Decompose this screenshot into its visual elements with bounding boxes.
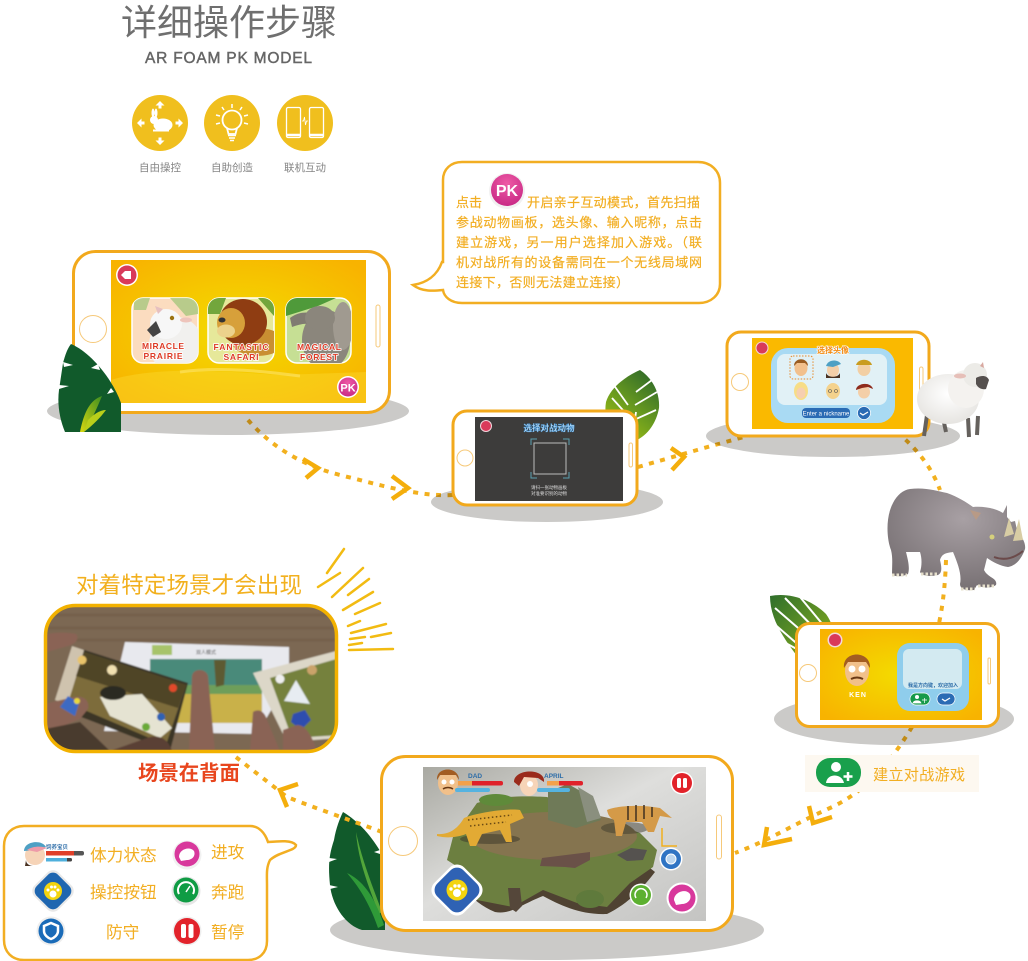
button: run <box>630 884 652 906</box>
avatar panel: 选择头像 <box>817 345 849 355</box>
phone 3: choose avatar <box>727 332 929 436</box>
arrow: chevron 1 <box>303 459 318 478</box>
shadow: phone 2 <box>431 482 663 522</box>
player status DAD: DAD <box>468 773 482 780</box>
caption: scene on the back: 场景在背面 <box>138 762 240 785</box>
leaf: dark green front of phone 1 <box>58 344 121 432</box>
nickname button: Enter a nickname <box>803 412 850 418</box>
phone 2: scan animal card <box>453 411 637 505</box>
shadow: phone 3 <box>706 415 960 457</box>
home button <box>80 316 106 342</box>
tile: Magical Forest <box>286 298 353 370</box>
legend label: run: 奔跑 <box>211 883 245 902</box>
legend icon: status bar <box>24 842 84 866</box>
tile: Fantastic Safari: FANTASTIC <box>214 342 268 352</box>
icon caption: free control: 自由操控 <box>139 161 181 174</box>
legend icon: defend <box>36 916 66 946</box>
speaker slot <box>716 815 722 859</box>
home button <box>457 450 473 466</box>
button: attack <box>666 882 698 914</box>
callout text: 参战动物画板，选头像、输入昵称，点击 <box>456 215 702 230</box>
phone 4 screen <box>820 629 982 720</box>
legend label: defend: 防守 <box>106 923 139 942</box>
legend icon: run <box>172 876 200 906</box>
speaker slot <box>920 367 923 392</box>
leaf: dark green behind phone 5 <box>329 812 385 930</box>
player status APRIL <box>514 772 583 796</box>
burst rays decoration <box>318 549 393 650</box>
PK button in callout: PK <box>496 183 519 200</box>
shadow: phone 4 <box>774 693 1014 745</box>
home button <box>800 664 816 682</box>
icon: creation light bulb <box>204 95 260 151</box>
callout text: 开启亲子互动模式，首先扫描 <box>527 195 700 210</box>
legend label: attack: 进攻 <box>211 843 245 862</box>
callout text: 连接下，否则无法建立连接） <box>456 275 629 290</box>
dashed flow path: phone 4 to phone 5 <box>735 727 912 853</box>
shadow: phone 1 <box>47 387 409 435</box>
tile: Miracle Prairie: PRAIRIE <box>144 351 183 361</box>
caption: only appears with specific scene: 对着特定场景才会出现 <box>76 573 302 598</box>
player status APRIL: APRIL <box>544 773 564 780</box>
hands right <box>250 710 317 751</box>
cheetah <box>437 809 524 846</box>
waiting panel <box>897 643 969 711</box>
speaker slot <box>988 658 990 684</box>
control pad <box>432 864 483 916</box>
photo: phones scanning the scene <box>40 600 342 756</box>
phone 5 screen <box>423 767 706 921</box>
phone 2 screen: 对准要识别的动物 <box>531 490 567 497</box>
label text: 建立对战游戏 <box>873 767 965 784</box>
phone 2 screen: 请扫一张动物画板 <box>531 484 567 491</box>
shadow: phone 5 <box>330 900 764 960</box>
phone 2 screen: 选择对战动物 <box>523 423 575 433</box>
tile: Miracle Prairie: MIRACLE <box>142 341 184 351</box>
right phone <box>253 650 340 742</box>
home button <box>388 826 418 856</box>
subtitle: AR FOAM PK MODEL <box>145 50 312 67</box>
island terrain <box>447 784 657 914</box>
avatar panel <box>771 345 895 423</box>
phone 3 screen <box>752 338 913 429</box>
left phone <box>55 646 188 751</box>
avatar KEN: KEN <box>849 692 867 699</box>
callout text line 1: 点击 <box>456 195 482 210</box>
icon caption: self creation: 自助创造 <box>211 161 253 174</box>
legend label: controller: 操控按钮 <box>90 883 157 902</box>
arrow: chevron 3 <box>671 448 684 470</box>
PK button in callout <box>489 173 525 209</box>
icon caption: linked interaction: 联机互动 <box>284 161 326 174</box>
title: 详细操作步骤 <box>121 2 337 43</box>
legend icon: status bar: 饲养宝贝 <box>46 843 69 851</box>
avatar KEN <box>844 654 870 699</box>
phone 1 screen <box>111 260 366 403</box>
back button <box>116 264 138 286</box>
tile: Fantastic Safari <box>208 298 284 363</box>
legend icon: attack <box>172 840 202 870</box>
tile: Magical Forest: MAGICAL <box>297 342 341 352</box>
callout: PK mode instructions <box>413 162 720 303</box>
phone 2 screen <box>475 417 623 501</box>
label: create battle game <box>805 755 979 792</box>
legend panel: game controls <box>4 826 296 960</box>
button: defend <box>660 848 682 870</box>
dashed flow path: rhino to phone 4 <box>938 560 946 628</box>
hands left <box>40 633 215 751</box>
dashed flow path: phone 5 to photo <box>232 754 382 832</box>
confirm button <box>858 406 870 420</box>
icon: linked phones <box>277 95 333 151</box>
phone 4: create game <box>796 624 998 726</box>
tiger <box>601 805 672 836</box>
tile: Miracle Prairie <box>131 297 199 364</box>
legend icon: pause <box>172 916 202 946</box>
paper scene card <box>104 642 289 734</box>
dashed flow path: phone 1 to 2 <box>248 420 453 495</box>
leaf: monstera behind phone 2 <box>605 370 659 444</box>
speaker slot <box>629 443 632 467</box>
tile: Fantastic Safari: SAFARI <box>224 352 258 362</box>
log and stones <box>508 848 647 912</box>
speaker slot <box>376 305 380 347</box>
icon: green add-user button <box>816 758 861 787</box>
leaf: monstera behind phone 4 <box>770 595 834 660</box>
callout text: 机对战所有的设备需同在一个无线局域网 <box>456 255 702 270</box>
legend icon: control pad <box>29 867 77 915</box>
dashed flow path: phone 3 to rhino <box>897 432 940 490</box>
phone 1: world selection <box>74 252 390 412</box>
arrow: chevron 4 <box>809 806 832 823</box>
legend label: status: 体力状态 <box>90 846 157 865</box>
legend label: pause: 暂停 <box>211 923 244 942</box>
callout text: 建立游戏，另一用户选择加入游戏。（联 <box>456 235 702 250</box>
PK button: PK <box>340 382 356 394</box>
phone 5: AR battle screen <box>382 756 732 930</box>
player status DAD <box>437 770 503 795</box>
arrow: chevron 2 <box>392 476 408 499</box>
tile: Magical Forest: FOREST <box>300 352 339 362</box>
rhino illustration <box>888 488 1025 590</box>
arrow: chevron to photo <box>280 784 298 807</box>
button: pause <box>670 772 694 794</box>
sheep illustration <box>917 362 989 437</box>
corner marker <box>662 828 677 846</box>
waiting panel: 我是方向键，欢迎加入 <box>908 682 958 689</box>
paper scene card: 双人模式 <box>196 649 216 656</box>
dashed flow path: phone 2 to 3 <box>638 425 790 467</box>
arrow: chevron 5 <box>764 827 792 845</box>
PK button <box>337 376 359 398</box>
home button <box>732 374 748 390</box>
icon: free control rabbit <box>132 95 188 151</box>
callout text <box>456 195 702 290</box>
feature icons row <box>132 95 333 151</box>
